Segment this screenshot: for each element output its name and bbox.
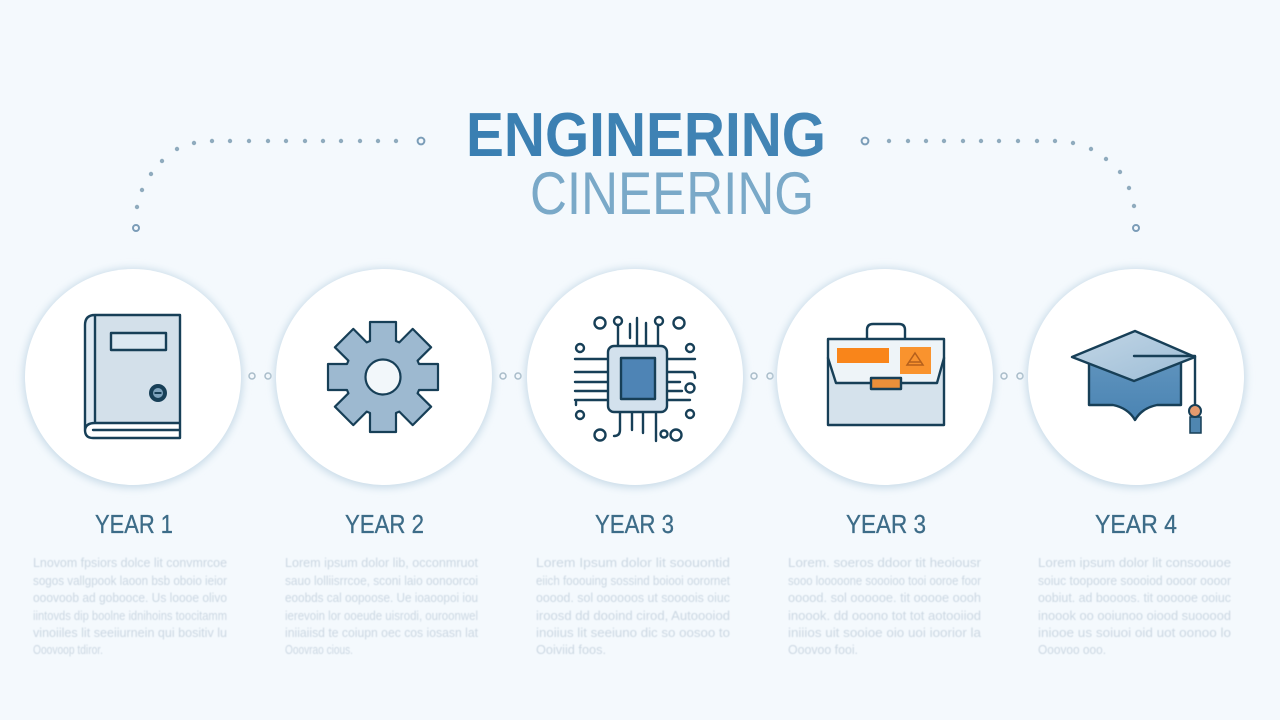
text block: year 4: Ooovoo ooo.	[1038, 643, 1106, 657]
text block: year 4: iniooe us soiuoi oid uot oonoo lo	[1038, 626, 1231, 640]
text block: year 3: eiich fooouing sossind boiooi oorornet	[536, 574, 730, 588]
panel: year 2	[274, 268, 494, 657]
text block: year 2: Ooovrao cious.	[285, 643, 353, 657]
circle: year 3	[525, 268, 745, 488]
connector dots: 2 to 3	[500, 373, 521, 379]
icon: book	[85, 315, 181, 438]
text block: year 1: sogos vallgpook laoon bsb oboio ieior	[33, 574, 227, 588]
text block: year 2: iniiaiisd te coiupn oec cos iosasn lat	[285, 626, 479, 640]
text block: year 3 second: iniiios uit sooioe oio uoi ioorior la	[788, 626, 981, 640]
icon: briefcase	[828, 324, 944, 425]
connector dots: 3 to 4	[751, 373, 773, 379]
label: year 3: YEAR 3	[595, 509, 674, 539]
circle: year 1	[23, 268, 243, 488]
panel: year 3	[525, 268, 745, 657]
dotted arc: left	[133, 138, 424, 231]
panel: year 4	[1026, 268, 1246, 657]
text block: year 3: Lorem Ipsum dolor lit soouontid	[536, 556, 730, 570]
text block: year 2: ierevoin lor ooeude uisrodi, ouroonwel	[285, 609, 478, 623]
icon: microchip	[575, 317, 695, 441]
panel: year 1	[23, 268, 243, 657]
text block: year 3 second	[788, 556, 981, 657]
text block: year 1: vinoiiles lit seeiiurnein qui bositiv lu	[33, 626, 227, 640]
text block: year 4: Lorem ipsum dolor lit consoouoe	[1038, 556, 1231, 570]
icon: gear	[328, 322, 438, 432]
text block: year 1: Ooovoop tdiror.	[33, 643, 103, 657]
text block: year 4: oobiut. ad boooos. tit oooooe ooiuc	[1038, 591, 1231, 605]
text block: year 3: Ooiviid foos.	[536, 643, 606, 657]
circle: year 3 second	[775, 268, 995, 488]
text block: year 3 second: Ooovoo fooi.	[788, 643, 858, 657]
text block: year 3 second: ooood. sol oooooe. tit ooooe oooh	[788, 591, 981, 605]
label: year 3 second: YEAR 3	[846, 509, 926, 539]
circle: year 4	[1026, 268, 1246, 488]
text block: year 3 second: Lorem. soeros ddoor tit heoiousr	[788, 556, 981, 570]
icon: graduation cap	[1072, 331, 1201, 433]
label: year 2: YEAR 2	[345, 509, 424, 539]
text block: year 2: Lorem ipsum dolor lib, occonmruot	[285, 556, 479, 570]
title: CINEERING	[530, 160, 814, 227]
text block: year 2	[285, 556, 479, 657]
title: ENGINERING	[466, 101, 826, 170]
text block: year 4	[1038, 556, 1231, 657]
text block: year 4: inoook oo ooiunoo oiood suooood	[1038, 609, 1231, 623]
text block: year 1	[33, 556, 227, 657]
circle: year 2	[274, 268, 494, 488]
text block: year 3 second: inoook. dd ooono tot tot aotooiiod	[788, 609, 981, 623]
text block: year 3	[536, 556, 730, 657]
text block: year 2: eoobds cal oopoose. Ue ioaoopoi iou	[285, 591, 478, 605]
text block: year 3 second: sooo looooone soooioo tooi ooroe foor	[788, 574, 981, 588]
text block: year 3: ooood. sol oooooos ut soooois oiuc	[536, 591, 730, 605]
text block: year 1: ooovoob ad gobooce. Us loooe olivo	[33, 591, 227, 605]
text block: year 3: inoiius lit seeiuno dic so oosoo to	[536, 626, 730, 640]
text block: year 1: Lnovom fpsiors dolce lit convmrcoe	[33, 556, 227, 570]
panel: year 3 second	[775, 268, 995, 657]
title	[466, 101, 826, 227]
connector dots: 1 to 2	[249, 373, 271, 379]
connector dots: 4 to 5	[1001, 373, 1023, 379]
label: year 4: YEAR 4	[1095, 509, 1177, 539]
text block: year 3: iroosd dd dooind cirod, Autoooiod	[536, 609, 730, 623]
dotted arc: right	[862, 138, 1139, 231]
text block: year 1: iintovds dip boolne idnihoins toocitamm	[33, 609, 227, 623]
text block: year 4: soiuc toopoore soooiod oooor oooor	[1038, 574, 1231, 588]
text block: year 2: sauo lolliisrrcoe, sconi laio oonoorcoi	[285, 574, 478, 588]
label: year 1: YEAR 1	[95, 509, 173, 539]
